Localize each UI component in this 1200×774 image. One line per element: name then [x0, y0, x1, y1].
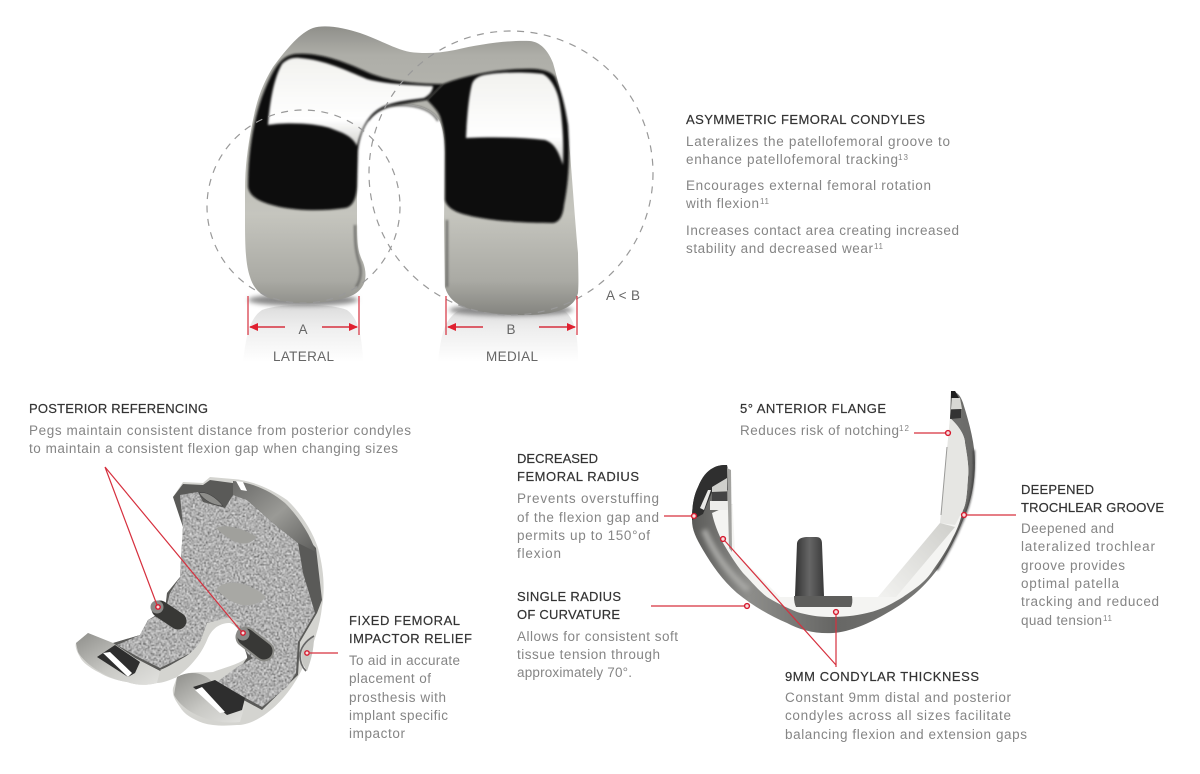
polished inner surface — [712, 418, 968, 617]
flange inner edge — [941, 447, 947, 515]
text block: single radius of curvature: SINGLE RADIUS — [517, 589, 622, 604]
fin: lower — [217, 583, 266, 605]
text block: anterior flange: Reduces risk of notching — [740, 423, 899, 438]
text block: fixed femoral impactor relief: placement of — [349, 671, 431, 686]
label: A < B: A < B — [606, 288, 640, 303]
intercondylar notch — [160, 618, 247, 678]
text block: asymmetric femoral condyles: enhance patellofemoral tracking — [686, 152, 898, 167]
panel: asymmetric condyles implant front view — [207, 26, 653, 364]
callout line: impactor relief — [305, 651, 338, 655]
text block: fixed femoral impactor relief: prosthesis with — [349, 690, 446, 705]
text block: condylar thickness: condyles across all sizes facilitate — [785, 708, 1011, 723]
callout: condylar thickness — [721, 537, 838, 667]
text block: fixed femoral impactor relief: implant specific — [349, 708, 448, 723]
label: lateral: LATERAL — [273, 349, 334, 364]
text block: decreased femoral radius: of the flexion gap and — [517, 510, 659, 525]
text block: asymmetric femoral condyles: with flexion — [685, 196, 759, 211]
medial mirror reflections — [427, 69, 569, 223]
panel: sagittal cross-section implant — [651, 391, 1016, 667]
text block: fixed femoral impactor relief — [349, 613, 473, 741]
upper metal rim — [233, 481, 316, 552]
dashed circle: lateral condyle radius — [207, 110, 400, 303]
text block: fixed femoral impactor relief: To aid in accurate — [349, 653, 460, 668]
text block: anterior flange — [740, 401, 910, 438]
text block: anterior flange: 12 — [899, 424, 910, 433]
text block: deepened trochlear groove: groove provides — [1021, 558, 1125, 573]
porous titanium coating — [117, 492, 315, 707]
text block: deepened trochlear groove: 11 — [1103, 614, 1113, 623]
text block: anterior flange: 5° ANTERIOR FLANGE — [740, 401, 887, 416]
fixation peg — [794, 537, 852, 607]
dimension B: B — [506, 322, 516, 337]
text block: decreased femoral radius: flexion — [517, 546, 561, 561]
text block: deepened trochlear groove: lateralized trochlear — [1021, 539, 1156, 554]
text block: single radius of curvature: OF CURVATURE — [517, 607, 621, 622]
text block: deepened trochlear groove: optimal patella — [1021, 576, 1119, 591]
text block: asymmetric femoral condyles: Increases contact area creating increased — [686, 223, 959, 238]
text block: condylar thickness: balancing flexion and extension gaps — [785, 727, 1027, 742]
text block: asymmetric femoral condyles: 11 — [760, 197, 770, 206]
peg: left — [150, 600, 178, 621]
text block: deepened trochlear groove: quad tension — [1021, 613, 1102, 628]
text block: condylar thickness: 9MM CONDYLAR THICKNESS — [785, 669, 980, 684]
band highlight — [704, 530, 748, 590]
callout: single radius of curvature — [651, 604, 749, 608]
floor reflection under condyles — [243, 294, 578, 362]
text block: asymmetric femoral condyles: 11 — [874, 242, 884, 251]
text block: asymmetric femoral condyles: Encourages external femoral rotation — [686, 178, 931, 193]
callout: anterior flange — [914, 431, 950, 435]
impactor relief recess — [300, 636, 314, 671]
text block: fixed femoral impactor relief: FIXED FEMORAL — [349, 613, 461, 628]
text block: decreased femoral radius — [517, 451, 659, 561]
dimension B — [446, 296, 577, 337]
text block: condylar thickness — [785, 669, 1027, 742]
posterior condyle tip — [692, 465, 732, 552]
text block: single radius of curvature: approximately 70°. — [517, 665, 632, 680]
femoral component body — [245, 26, 578, 315]
fin: middle — [216, 526, 257, 543]
text block: posterior referencing: Pegs maintain consistent distance from posterior condyles — [29, 423, 411, 438]
text block: deepened trochlear groove: tracking and reduced — [1021, 594, 1159, 609]
text block: asymmetric femoral condyles: Lateralizes the patellofemoral groove to — [686, 134, 950, 149]
text block: asymmetric femoral condyles: 13 — [898, 153, 909, 162]
text block: fixed femoral impactor relief: IMPACTOR RELIEF — [349, 631, 473, 646]
text block: asymmetric femoral condyles: stability and decreased wear — [686, 241, 874, 256]
text block: deepened trochlear groove — [1021, 482, 1165, 628]
anterior flange face — [940, 418, 968, 525]
panel: porous back view implant — [76, 467, 338, 726]
dark fixation lip — [113, 480, 322, 710]
empty interior — [731, 400, 951, 597]
text block: fixed femoral impactor relief: impactor — [349, 726, 406, 741]
text block: decreased femoral radius: FEMORAL RADIUS — [517, 469, 640, 484]
text block: decreased femoral radius: Prevents overstuffing — [517, 491, 659, 506]
callout lines: posterior pegs — [105, 467, 245, 635]
right condyle tip — [174, 673, 245, 723]
anterior flange tip — [950, 391, 964, 419]
dimension A: A — [298, 322, 308, 337]
text block: single radius of curvature: Allows for consistent soft — [517, 629, 678, 644]
callout: decreased femoral radius — [664, 514, 696, 518]
text block: asymmetric femoral condyles — [685, 112, 959, 256]
text block: single radius of curvature: tissue tension through — [517, 647, 660, 662]
lateral mirror reflections — [248, 54, 443, 210]
label: medial: MEDIAL — [486, 349, 538, 364]
text block: condylar thickness: Constant 9mm distal and posterior — [785, 690, 1012, 705]
text block: deepened trochlear groove: DEEPENED — [1021, 482, 1095, 497]
callout: deepened trochlear groove — [962, 513, 1016, 517]
fin: upper — [199, 493, 223, 506]
text block: decreased femoral radius: permits up to 150°of — [517, 528, 650, 543]
left condyle tip — [76, 633, 160, 685]
peg: right — [236, 628, 264, 651]
text block: posterior referencing — [29, 401, 411, 456]
text block: deepened trochlear groove: Deepened and — [1021, 521, 1114, 536]
dimension A — [248, 296, 359, 337]
notch edge shading — [355, 105, 447, 287]
silver implant shell — [76, 477, 324, 726]
text block: single radius of curvature — [517, 589, 678, 680]
text block: posterior referencing: POSTERIOR REFERENCING — [29, 401, 209, 416]
text block: decreased femoral radius: DECREASED — [517, 451, 599, 466]
band dark outer edge — [937, 450, 974, 570]
text block: deepened trochlear groove: TROCHLEAR GROOVE — [1021, 500, 1165, 515]
dashed circle: medial condyle radius — [369, 31, 653, 315]
text block: asymmetric femoral condyles: ASYMMETRIC FEMORAL CONDYLES — [686, 112, 926, 127]
outer condylar band — [692, 392, 975, 633]
trochlear facet — [878, 523, 955, 597]
text block: posterior referencing: to maintain a consistent flexion gap when changing sizes — [29, 441, 398, 456]
